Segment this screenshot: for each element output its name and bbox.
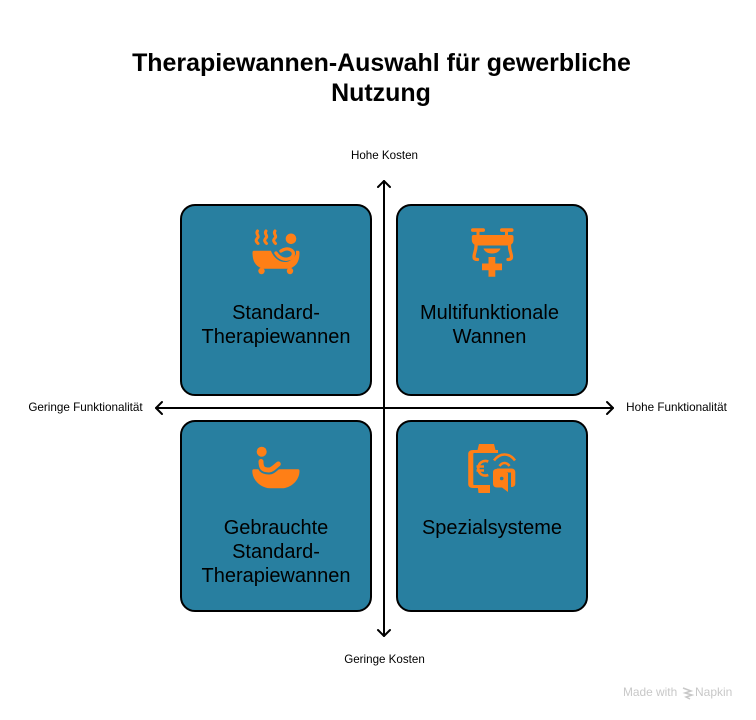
title: Nutzung: [331, 79, 431, 107]
label: Gebrauchte Standard-Therapiewannen: Gebrauchte: [224, 517, 328, 539]
watermark: Made with Napkin: [623, 685, 732, 699]
icon: person in tub: [252, 447, 300, 488]
icon: drone with cross: [471, 228, 514, 277]
label: Gebrauchte Standard-Therapiewannen: Therapiewannen: [202, 565, 350, 587]
label: Multifunktionale Wannen: [420, 302, 559, 348]
label: Standard-Therapiewannen: [202, 302, 350, 348]
label: Standard-Therapiewannen: Standard-: [232, 302, 320, 324]
title: [132, 49, 631, 107]
icon: euro watch with wifi and lock: [468, 444, 515, 493]
arrow: horizontal axis: [156, 402, 613, 414]
label: Gebrauchte Standard-Therapiewannen: Standard-: [232, 541, 320, 563]
panel: Gebrauchte Standard-Therapiewannen: [181, 421, 371, 611]
icon: bathtub with steam: [252, 231, 300, 274]
arrow: vertical axis: [378, 181, 390, 636]
panel: Spezialsysteme: [397, 421, 587, 611]
label: Multifunktionale Wannen: Multifunktionale: [420, 302, 559, 324]
axis label: low functionality: Geringe Funktionalität: [28, 401, 143, 414]
label: Gebrauchte Standard-Therapiewannen: [202, 517, 350, 587]
title: Therapiewannen-Auswahl für gewerbliche: [132, 49, 631, 77]
panel: Standard-Therapiewannen: [181, 205, 371, 395]
label: Standard-Therapiewannen: Therapiewannen: [202, 326, 350, 348]
axis label: low cost: Geringe Kosten: [344, 653, 425, 666]
watermark: Made with Napkin: Made with: [623, 685, 677, 699]
label: Multifunktionale Wannen: Wannen: [453, 326, 526, 348]
label: Spezialsysteme: Spezialsysteme: [422, 517, 562, 539]
panel: Multifunktionale Wannen: [397, 205, 587, 395]
axis label: high functionality: Hohe Funktionalität: [626, 401, 728, 414]
watermark: Made with Napkin: Napkin: [695, 685, 732, 699]
axis label: high cost: Hohe Kosten: [351, 149, 418, 162]
